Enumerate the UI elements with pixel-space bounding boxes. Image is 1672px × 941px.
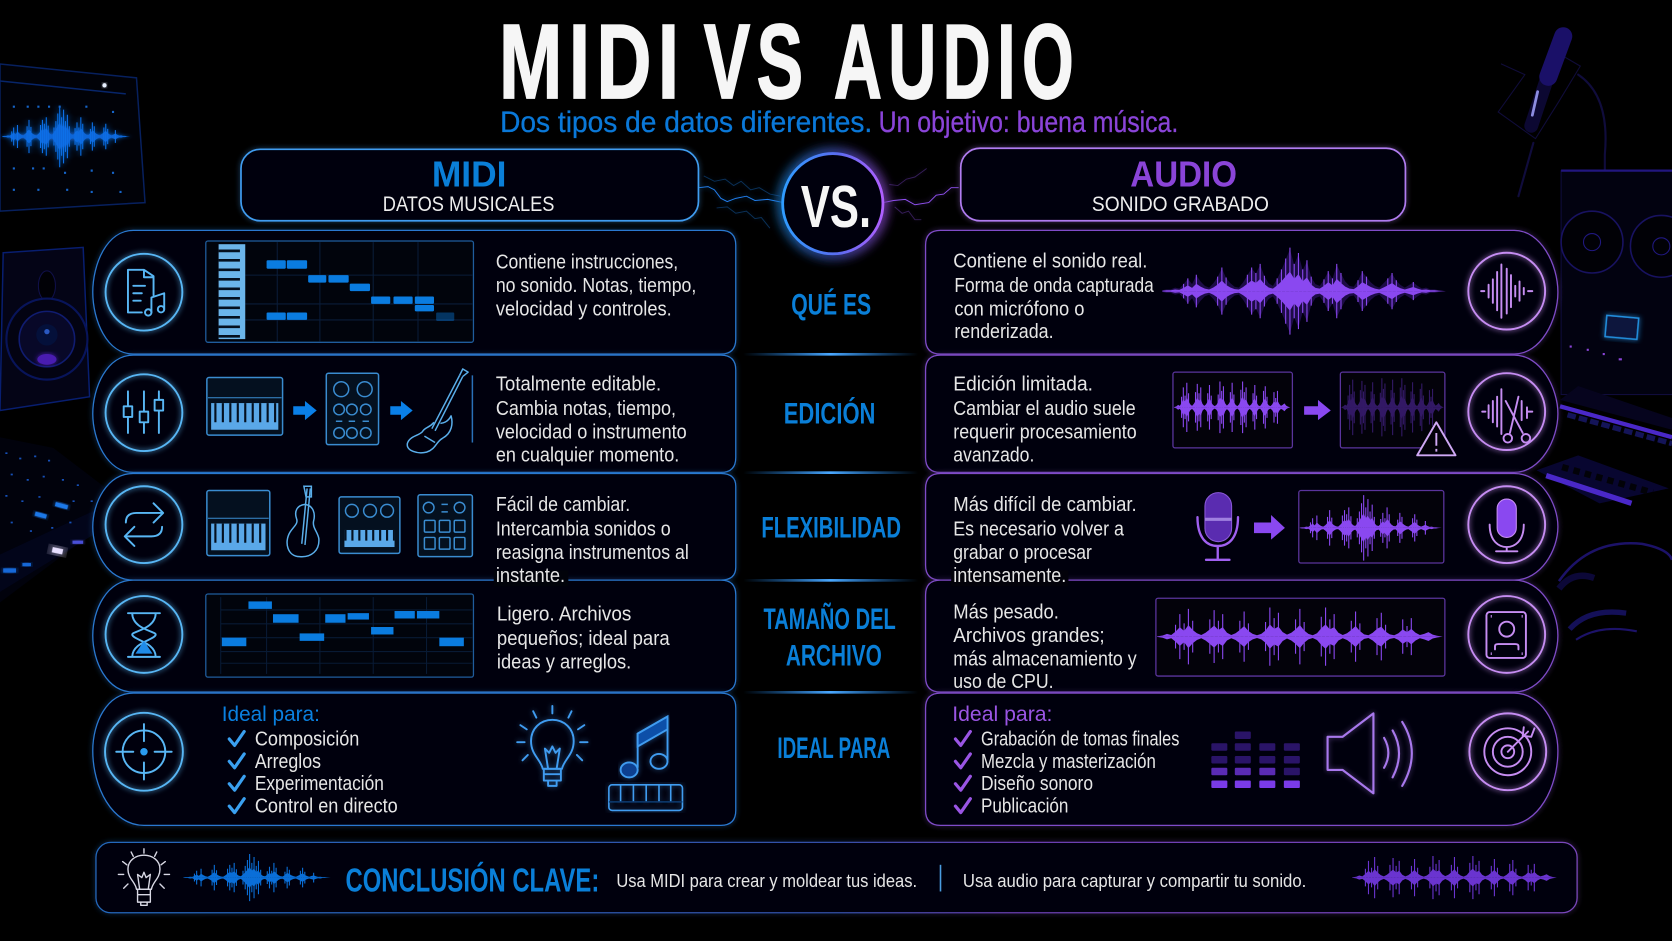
- checklist: Grabación de tomas finales: [981, 728, 1179, 750]
- icon: document with note: [106, 254, 182, 331]
- text: renderizada.: [954, 321, 1054, 343]
- text: reasigna instrumentos al: [496, 542, 689, 564]
- center labels: [761, 288, 901, 765]
- divider: [940, 865, 942, 891]
- text: [953, 494, 1137, 564]
- panel: MIDI edicion: [93, 355, 736, 472]
- decor: mixer: [0, 437, 112, 602]
- arrow: [1304, 400, 1331, 420]
- text: [496, 494, 689, 564]
- panel: MIDI que es: [93, 230, 736, 354]
- decor: tape recorder: [1561, 171, 1672, 395]
- text: grabar o procesar: [953, 542, 1092, 564]
- checklist: Publicación: [981, 796, 1068, 818]
- text: uso de CPU.: [953, 671, 1054, 693]
- lightning: right: [883, 168, 959, 220]
- text: [953, 251, 1154, 343]
- piano roll: [206, 241, 473, 342]
- module with keys: [339, 497, 400, 553]
- checklist: [955, 728, 1179, 818]
- title: [499, 2, 1080, 121]
- panel: MIDI flexibilidad: [93, 473, 736, 580]
- text: Cambiar el audio suele: [953, 398, 1136, 420]
- text: velocidad o instrumento: [496, 421, 687, 443]
- panel: AUDIO tamano: [926, 580, 1558, 693]
- icon: violin: [287, 486, 319, 557]
- icon: hourglass: [106, 596, 182, 673]
- checklist: Composición: [255, 728, 359, 750]
- text: [953, 601, 1137, 693]
- decor: microphone: [1498, 36, 1606, 196]
- decor: studio monitor: [0, 64, 145, 211]
- text: Totalmente editable.: [496, 373, 661, 395]
- icon: loudspeaker: [1328, 713, 1412, 793]
- text: velocidad y controles.: [496, 299, 672, 321]
- sequencer: [206, 594, 473, 677]
- center labels: EDICIÓN: [784, 396, 875, 430]
- icon: microphone circle: [1468, 486, 1545, 563]
- center labels: FLEXIBILIDAD: [761, 511, 901, 544]
- text: [496, 373, 687, 467]
- icon: bulb: [118, 849, 170, 905]
- icon: keyboard: [609, 785, 682, 810]
- module: [326, 373, 379, 445]
- arrow: [390, 401, 413, 420]
- center labels: IDEAL PARA: [777, 732, 890, 765]
- wave box: [1299, 491, 1444, 563]
- text: con micrófono o: [954, 299, 1084, 321]
- header: MIDI: MIDI: [432, 155, 507, 195]
- panel: AUDIO que es: [926, 230, 1558, 354]
- subtitle: [500, 106, 1178, 139]
- equalizer: [1211, 732, 1300, 788]
- icon: speaker drive: [1468, 596, 1545, 673]
- subtitle: Dos tipos de datos diferentes.: [500, 106, 872, 139]
- icon: waveform: [1468, 253, 1545, 330]
- text: Más difícil de cambiar.: [953, 494, 1137, 516]
- checklist: Arreglos: [255, 751, 321, 773]
- center labels: ARCHIVO: [786, 639, 882, 672]
- checklist: Control en directo: [255, 796, 398, 818]
- text: Más pesado.: [953, 601, 1059, 623]
- text: Forma de onda capturada: [954, 275, 1154, 297]
- row dividers: [743, 353, 918, 694]
- panel: AUDIO edicion: [926, 355, 1558, 472]
- checklist: Diseño sonoro: [981, 773, 1093, 795]
- header: AUDIO: [961, 148, 1405, 221]
- panel: AUDIO flexibilidad: [926, 473, 1558, 580]
- icon: light bulb: [517, 706, 588, 786]
- subtitle: Un objetivo: buena música.: [879, 106, 1178, 139]
- text: pequeños; ideal para: [497, 628, 670, 650]
- text: Edición limitada.: [953, 373, 1093, 395]
- heading: Ideal para:: [222, 703, 320, 726]
- text: [496, 252, 696, 321]
- center labels: QUÉ ES: [791, 288, 871, 322]
- text: Contiene el sonido real.: [953, 251, 1147, 273]
- header: AUDIO: SONIDO GRABADO: [1092, 193, 1269, 216]
- text: [953, 373, 1137, 467]
- synth: [207, 377, 283, 435]
- waveform: [1352, 856, 1557, 899]
- text: Ligero. Archivos: [497, 604, 631, 626]
- pads: [418, 495, 472, 557]
- text: [497, 604, 670, 674]
- text: Cambia notas, tiempo,: [496, 398, 676, 420]
- waveform: [183, 854, 331, 901]
- header: MIDI: DATOS MUSICALES: [383, 193, 554, 216]
- text: requerir procesamiento: [953, 421, 1137, 443]
- decor: keyboards: [1537, 386, 1672, 503]
- text: en cualquier momento.: [496, 445, 679, 467]
- title: MIDI: [499, 4, 686, 121]
- title: VS: [704, 3, 809, 121]
- checklist: Mezcla y masterización: [981, 751, 1156, 773]
- text: Es necesario volver a: [953, 518, 1125, 540]
- text: intensamente over border: intensamente.: [953, 565, 1066, 587]
- header: MIDI: [241, 149, 698, 221]
- icon: microphone: [1197, 493, 1238, 560]
- decor: studio speaker: [0, 247, 90, 411]
- icon: sliders: [106, 374, 182, 451]
- icon: swap arrows: [106, 486, 182, 563]
- header: AUDIO: AUDIO: [1130, 155, 1237, 195]
- vs badge: VS.: [801, 173, 871, 240]
- icon: warning: [1417, 422, 1456, 455]
- waveform: [1162, 248, 1446, 335]
- text: instante over border: instante.: [496, 565, 565, 587]
- text: avanzado.: [953, 445, 1034, 467]
- panel: MIDI tamano: [93, 580, 736, 692]
- icon: music note: [621, 717, 668, 777]
- wave box after: [1340, 372, 1445, 448]
- text: más almacenamiento y: [953, 648, 1137, 670]
- text: Fácil de cambiar.: [496, 494, 630, 516]
- synth: [207, 491, 270, 556]
- wave box: [1156, 598, 1445, 676]
- text: Intercambia sonidos o: [496, 518, 671, 540]
- checklist: [229, 728, 398, 818]
- text: no sonido. Notas, tiempo,: [496, 275, 696, 297]
- checklist: Experimentación: [255, 773, 384, 795]
- wave box before: [1173, 372, 1292, 448]
- text: MIDI: Usa MIDI para crear y moldear tus ideas.: [616, 871, 917, 891]
- heading: CONCLUSIÓN CLAVE:: [345, 861, 599, 899]
- panel: conclusion: [96, 842, 1577, 913]
- icon: target: [1469, 713, 1546, 790]
- vs badge: [783, 154, 883, 254]
- lightning: left: [698, 176, 784, 228]
- arrow: [1254, 515, 1285, 540]
- text: Contiene instrucciones,: [496, 252, 678, 274]
- decor: headphones: [1559, 543, 1672, 640]
- center labels: TAMAÑO DEL: [763, 602, 896, 636]
- text: Archivos grandes;: [953, 625, 1105, 647]
- title: AUDIO: [834, 2, 1080, 121]
- icon: guitar: [407, 369, 472, 453]
- text: audio: Usa audio para capturar y compartir tu sonido.: [963, 871, 1306, 891]
- arrow: [293, 401, 317, 420]
- panel: MIDI ideal para: [93, 693, 736, 825]
- icon: cut wave: [1468, 373, 1545, 450]
- heading: Ideal para:: [952, 703, 1052, 726]
- panel: AUDIO ideal para: [926, 693, 1558, 825]
- icon: crosshair: [105, 713, 183, 791]
- text: ideas y arreglos.: [497, 652, 631, 674]
